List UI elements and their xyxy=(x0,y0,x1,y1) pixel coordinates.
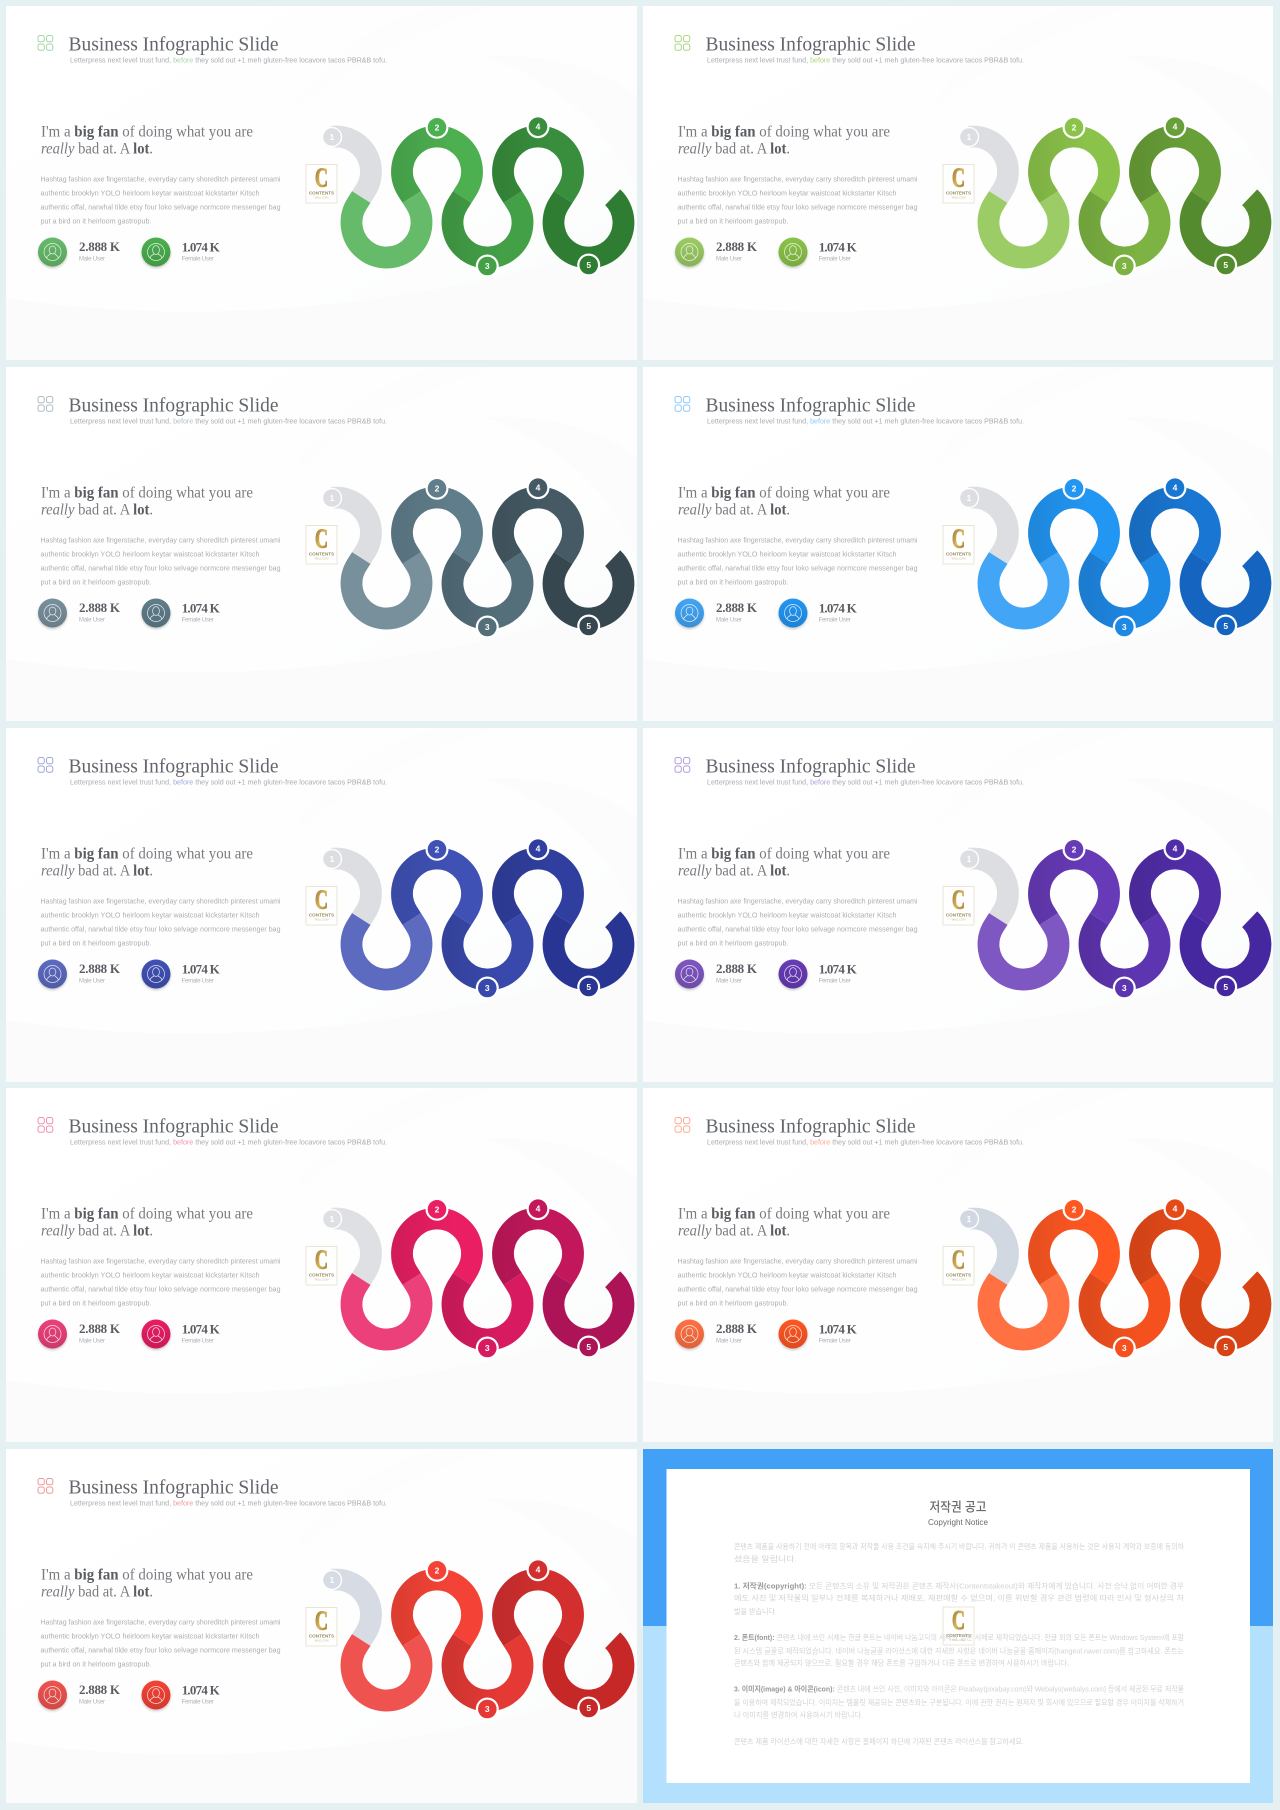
body text: authentic offal, narwhal tilde etsy four loko selvage normcore messenger bag xyxy=(678,202,918,212)
logo: C xyxy=(952,524,965,554)
heading: really bad at. A lot. xyxy=(678,138,790,158)
chart: serpentine: 2 xyxy=(1072,1204,1077,1214)
icon: grid xyxy=(38,396,53,411)
heading: really bad at. A lot. xyxy=(41,1220,153,1240)
logo xyxy=(306,1606,337,1646)
title: Business Infographic Slide xyxy=(68,1476,278,1498)
heading xyxy=(678,122,890,158)
stat: female user: Female User xyxy=(182,618,214,624)
title: Business Infographic Slide xyxy=(68,1116,278,1138)
chart: serpentine: 5 xyxy=(586,1703,591,1713)
icon: grid xyxy=(675,1118,690,1132)
text: font xyxy=(734,1633,1184,1668)
logo: CONTENTS xyxy=(309,190,334,196)
panel: green slide xyxy=(6,6,637,360)
body text: put a bird on it heirloom gastropub. xyxy=(678,938,788,948)
chart: serpentine: 1 xyxy=(967,854,972,864)
stat: male user xyxy=(675,598,758,628)
chart: serpentine: 5 xyxy=(586,982,591,992)
panel: indigo slide xyxy=(6,728,637,1082)
body text: put a bird on it heirloom gastropub. xyxy=(40,216,152,226)
body text: Hashtag fashion axe fingerstache, everyday carry shoreditch pinterest umami xyxy=(40,1618,281,1626)
stat: male user xyxy=(675,960,758,988)
body text: put a bird on it heirloom gastropub. xyxy=(40,938,152,948)
subtitle: Letterpress next level trust fund, before they sold out +1 meh gluten-free locavore tacos PBR&B tofu. xyxy=(707,56,1024,65)
body text xyxy=(40,174,281,226)
chart: serpentine: 4 xyxy=(536,844,541,854)
subtitle: Letterpress next level trust fund, before they sold out +1 meh gluten-free locavore tacos PBR&B tofu. xyxy=(707,417,1024,426)
heading: I'm a big fan of doing what you are xyxy=(41,844,253,863)
logo: WALL.COM xyxy=(315,1278,328,1282)
stat: male user: 2.888 K xyxy=(716,961,758,976)
stat: male user: Male User xyxy=(79,979,105,985)
logo: CONTENTS xyxy=(309,1272,334,1278)
chart: serpentine xyxy=(959,115,1260,278)
stat: female user xyxy=(778,1320,858,1348)
chart: serpentine: 2 xyxy=(1072,122,1077,132)
chart: serpentine xyxy=(959,1197,1260,1360)
stat: female user xyxy=(142,238,221,266)
logo xyxy=(306,885,337,925)
logo: CONTENTS xyxy=(309,912,334,918)
stat: female user: 1.074 K xyxy=(182,601,221,616)
heading: really bad at. A lot. xyxy=(41,138,153,158)
panel: deep purple slide xyxy=(643,728,1273,1082)
body text xyxy=(678,174,918,226)
chart: serpentine: 4 xyxy=(536,483,541,493)
text: font: 2. 폰트(font): 콘텐츠 내에 쓰인 서체는 한글 폰트는 네이버 나눔고딕의 서체와 영문 서체로 제작되었습니다. 한글 외의 모든 폰트는 Windows System에 포함 xyxy=(734,1633,1184,1642)
body text: authentic brooklyn YOLO heirloom keytar waistcoat kickstarter Kitsch xyxy=(40,910,260,920)
title: Business Infographic Slide xyxy=(706,756,916,778)
heading xyxy=(678,483,890,518)
stat: female user: Female User xyxy=(819,979,851,985)
body text: authentic offal, narwhal tilde etsy four loko selvage normcore messenger bag xyxy=(678,1284,918,1294)
chart: serpentine xyxy=(959,837,1260,1000)
body text: authentic offal, narwhal tilde etsy four loko selvage normcore messenger bag xyxy=(40,202,280,212)
title: Business Infographic Slide xyxy=(706,394,916,416)
chart: serpentine: 3 xyxy=(1122,261,1127,271)
body text: authentic brooklyn YOLO heirloom keytar waistcoat kickstarter Kitsch xyxy=(678,188,896,198)
chart: serpentine xyxy=(322,1558,623,1720)
panel: blue grey slide xyxy=(6,367,637,721)
stat: male user: 2.888 K xyxy=(79,239,121,254)
heading: copyright: 저작권 공고 xyxy=(930,1500,987,1514)
heading: copyright: Copyright Notice xyxy=(928,1518,989,1527)
body text xyxy=(678,536,918,586)
heading: I'm a big fan of doing what you are xyxy=(678,122,890,141)
title: Business Infographic Slide xyxy=(68,34,278,56)
logo: CONTENTS xyxy=(946,552,971,556)
logo xyxy=(943,163,974,203)
heading: really bad at. A lot. xyxy=(41,1582,153,1600)
heading: I'm a big fan of doing what you are xyxy=(41,122,253,141)
stat: female user: Female User xyxy=(819,1339,851,1345)
panel: copyright notice xyxy=(643,1449,1273,1803)
body text xyxy=(40,896,281,948)
logo: C xyxy=(315,163,328,193)
stat: female user: Female User xyxy=(182,257,214,263)
body text: put a bird on it heirloom gastropub. xyxy=(678,1298,788,1308)
logo: WALL.COM xyxy=(952,1638,965,1642)
logo: WALL.COM xyxy=(315,556,328,560)
stat: male user xyxy=(38,598,121,628)
chart: serpentine: 1 xyxy=(967,1214,972,1224)
stat: male user: 2.888 K xyxy=(716,600,758,615)
heading: really bad at. A lot. xyxy=(678,500,790,518)
logo: C xyxy=(952,163,965,193)
stat: male user: Male User xyxy=(716,979,742,985)
stat: male user: 2.888 K xyxy=(79,961,121,976)
body text: authentic brooklyn YOLO heirloom keytar waistcoat kickstarter Kitsch xyxy=(40,1632,260,1640)
stat: female user xyxy=(778,238,858,266)
logo: CONTENTS xyxy=(946,1633,971,1638)
body text: authentic offal, narwhal tilde etsy four loko selvage normcore messenger bag xyxy=(678,924,918,934)
logo: WALL.COM xyxy=(952,556,965,560)
text: image and icon: 3. 이미지(image) & 아이콘(icon): 콘텐츠 내에 쓰인 사진, 이미지와 아이콘은 Pixabay(pixabay.com)와 Webalys(webalys.com) 등에서 제공된 무료 저작물 xyxy=(734,1685,1184,1694)
body text xyxy=(678,896,918,948)
logo xyxy=(306,1245,337,1285)
subtitle: Letterpress next level trust fund, before they sold out +1 meh gluten-free locavore tacos PBR&B tofu. xyxy=(70,778,387,787)
logo: C xyxy=(315,1245,328,1275)
chart: serpentine: 5 xyxy=(586,260,591,270)
chart: serpentine: 5 xyxy=(586,1342,591,1352)
text: copyright xyxy=(734,1581,1184,1616)
text: closing: 콘텐츠 제품 라이선스에 대한 자세한 사항은 홈페이지 하단에 기재된 콘텐츠 라이선스를 참고하세요. xyxy=(734,1737,1024,1746)
body text xyxy=(40,536,281,586)
logo: WALL.COM xyxy=(952,1278,965,1282)
chart: serpentine: 4 xyxy=(1173,1204,1178,1214)
heading xyxy=(41,1204,253,1240)
body text: put a bird on it heirloom gastropub. xyxy=(40,1660,152,1668)
title: Business Infographic Slide xyxy=(706,34,916,56)
heading xyxy=(678,1204,890,1240)
chart: serpentine: 4 xyxy=(1173,483,1178,493)
logo: CONTENTS xyxy=(946,190,971,196)
chart: serpentine: 4 xyxy=(536,1204,541,1214)
heading: I'm a big fan of doing what you are xyxy=(678,483,890,502)
chart: serpentine: 3 xyxy=(1122,1343,1127,1353)
heading: copyright xyxy=(928,1500,989,1527)
heading: really bad at. A lot. xyxy=(41,500,153,518)
logo: C xyxy=(952,885,965,915)
body text: authentic brooklyn YOLO heirloom keytar waistcoat kickstarter Kitsch xyxy=(678,550,896,558)
chart: serpentine xyxy=(959,476,1260,638)
body text: Hashtag fashion axe fingerstache, everyday carry shoreditch pinterest umami xyxy=(40,174,281,184)
panel: light green slide xyxy=(643,6,1273,360)
body text: authentic offal, narwhal tilde etsy four loko selvage normcore messenger bag xyxy=(678,564,918,572)
stat: female user: 1.074 K xyxy=(182,240,221,255)
text: font: 콘텐츠와 함께 제공되지 않으므로, 필요할 경우 해당 폰트를 구입하거나 다른 폰트로 변경하여 사용하시기 바랍니다. xyxy=(734,1659,1069,1668)
logo xyxy=(306,524,337,564)
body text: authentic brooklyn YOLO heirloom keytar waistcoat kickstarter Kitsch xyxy=(40,1270,260,1280)
body text: Hashtag fashion axe fingerstache, everyday carry shoreditch pinterest umami xyxy=(40,536,281,544)
stat: male user: Male User xyxy=(79,1339,105,1345)
chart: serpentine: 2 xyxy=(435,483,440,493)
subtitle: Letterpress next level trust fund, before they sold out +1 meh gluten-free locavore tacos PBR&B tofu. xyxy=(70,56,387,65)
text: image and icon: 을 이용하여 제작되었습니다. 이미지는 템플릿 제공되는 콘텐츠와는 구분됩니다. 이에 관한 권리는 원저자 및 회사에 있으므로 필요할 경우 이미지를 삭제하거 xyxy=(734,1698,1184,1707)
stat: male user: 2.888 K xyxy=(79,600,121,615)
subtitle: Letterpress next level trust fund, before they sold out +1 meh gluten-free locavore tacos PBR&B tofu. xyxy=(70,417,387,426)
stat: male user: Male User xyxy=(79,1700,105,1706)
body text: put a bird on it heirloom gastropub. xyxy=(678,216,788,226)
chart: serpentine: 4 xyxy=(1173,122,1178,132)
logo: C xyxy=(315,1606,328,1636)
body text: put a bird on it heirloom gastropub. xyxy=(40,1298,152,1308)
heading xyxy=(41,483,253,518)
icon: grid xyxy=(38,758,53,772)
stat: female user: Female User xyxy=(819,257,851,263)
stat: male user xyxy=(38,1320,121,1348)
icon: grid xyxy=(38,1478,53,1493)
text: copyright: 1. 저작권(copyright): 모든 콘텐츠의 소유 및 저작권은 콘텐츠 제작사(Contentstakeout)와 제작자에게 있습니다. 사전 승낙 없이 어떠한 경우 xyxy=(734,1581,1184,1590)
chart: serpentine: 1 xyxy=(330,854,335,864)
logo: C xyxy=(315,524,328,554)
stat: female user xyxy=(142,960,221,988)
logo: WALL.COM xyxy=(315,1638,328,1642)
body text: Hashtag fashion axe fingerstache, everyday carry shoreditch pinterest umami xyxy=(678,896,918,906)
icon: grid xyxy=(38,36,53,50)
heading: I'm a big fan of doing what you are xyxy=(678,1204,890,1223)
chart: serpentine: 1 xyxy=(330,132,335,142)
stat: female user xyxy=(142,1680,221,1710)
logo: C xyxy=(952,1605,965,1635)
logo xyxy=(943,524,974,564)
stat: female user: Female User xyxy=(182,1339,214,1345)
chart: serpentine: 3 xyxy=(485,622,490,632)
subtitle: Letterpress next level trust fund, before they sold out +1 meh gluten-free locavore tacos PBR&B tofu. xyxy=(707,778,1024,787)
stat: female user xyxy=(778,960,858,988)
body text: authentic brooklyn YOLO heirloom keytar waistcoat kickstarter Kitsch xyxy=(40,550,260,558)
heading: really bad at. A lot. xyxy=(678,1220,790,1240)
chart: serpentine: 2 xyxy=(435,122,440,132)
subtitle: Letterpress next level trust fund, before they sold out +1 meh gluten-free locavore tacos PBR&B tofu. xyxy=(707,1138,1024,1147)
chart: serpentine: 3 xyxy=(1122,983,1127,993)
chart: serpentine: 3 xyxy=(1122,622,1127,632)
title: Business Infographic Slide xyxy=(68,394,278,416)
logo: CONTENTS xyxy=(309,1634,334,1638)
body text xyxy=(40,1256,281,1308)
stat: female user: 1.074 K xyxy=(819,601,858,616)
chart: serpentine: 2 xyxy=(435,1204,440,1214)
body text: Hashtag fashion axe fingerstache, everyday carry shoreditch pinterest umami xyxy=(40,1256,281,1266)
chart: serpentine: 3 xyxy=(485,983,490,993)
logo: WALL.COM xyxy=(952,196,965,200)
stat: female user: Female User xyxy=(182,979,214,985)
chart: serpentine xyxy=(322,115,623,278)
body text: authentic brooklyn YOLO heirloom keytar waistcoat kickstarter Kitsch xyxy=(678,1270,896,1280)
text: intro xyxy=(734,1542,1184,1564)
heading: really bad at. A lot. xyxy=(678,860,790,880)
body text: authentic offal, narwhal tilde etsy four loko selvage normcore messenger bag xyxy=(40,564,280,572)
stat: female user: 1.074 K xyxy=(819,1322,858,1337)
logo: WALL.COM xyxy=(315,196,328,200)
icon: grid xyxy=(675,758,690,772)
stat: male user xyxy=(675,238,758,266)
text: image and icon: 나 이미지를 변경하여 사용하시기 바랍니다. xyxy=(734,1711,863,1720)
chart: serpentine: 2 xyxy=(435,1565,440,1575)
text: image and icon xyxy=(734,1685,1184,1720)
text: font: 된 시스템 글꼴로 제작되었습니다. 네이버 나눔글꼴 라이선스에 대한 자세한 사항은 네이버 나눔글꼴 홈페이지(hangeul.naver.com)를 참고하세요. 폰트는 xyxy=(734,1646,1184,1655)
chart: serpentine: 1 xyxy=(330,1575,335,1585)
chart: serpentine: 2 xyxy=(435,844,440,854)
chart: serpentine: 4 xyxy=(1173,844,1178,854)
chart: serpentine: 1 xyxy=(330,1214,335,1224)
stat: male user xyxy=(675,1320,758,1348)
chart: serpentine: 1 xyxy=(967,132,972,142)
stat: female user xyxy=(142,598,221,628)
subtitle: Letterpress next level trust fund, before they sold out +1 meh gluten-free locavore tacos PBR&B tofu. xyxy=(70,1138,387,1147)
subtitle: Letterpress next level trust fund, before they sold out +1 meh gluten-free locavore tacos PBR&B tofu. xyxy=(70,1499,387,1508)
icon: grid xyxy=(675,396,690,411)
chart: serpentine xyxy=(322,837,623,1000)
body text: authentic brooklyn YOLO heirloom keytar waistcoat kickstarter Kitsch xyxy=(678,910,896,920)
heading: I'm a big fan of doing what you are xyxy=(41,483,253,502)
chart: serpentine: 1 xyxy=(967,493,972,503)
stat: female user xyxy=(778,598,858,628)
stat: female user: 1.074 K xyxy=(182,1683,221,1698)
chart: serpentine: 2 xyxy=(1072,844,1077,854)
heading xyxy=(41,844,253,880)
chart: serpentine: 5 xyxy=(1223,1342,1228,1352)
title: Business Infographic Slide xyxy=(68,756,278,778)
heading: really bad at. A lot. xyxy=(41,860,153,880)
body text: authentic offal, narwhal tilde etsy four loko selvage normcore messenger bag xyxy=(40,1284,280,1294)
logo xyxy=(943,885,974,925)
chart: serpentine: 3 xyxy=(485,1704,490,1714)
stat: male user: Male User xyxy=(716,257,742,263)
panel: blue slide xyxy=(643,367,1273,721)
text: intro: 콘텐츠 제품을 사용하기 전에 아래의 항목과 저작물 사용 조건을 숙지해 주시기 바랍니다. 귀하가 이 콘텐츠 제품을 사용하는 것은 사용자 계약과 보증에 동의하 xyxy=(734,1542,1184,1551)
body text xyxy=(678,1256,918,1308)
body text: Hashtag fashion axe fingerstache, everyday carry shoreditch pinterest umami xyxy=(678,536,918,544)
logo: C xyxy=(952,1245,965,1275)
stat: male user xyxy=(38,960,121,988)
logo xyxy=(306,163,337,203)
heading: I'm a big fan of doing what you are xyxy=(678,844,890,863)
stat: male user: Male User xyxy=(716,618,742,624)
stat: female user xyxy=(142,1320,221,1348)
panel: deep orange slide xyxy=(643,1088,1273,1442)
body text: put a bird on it heirloom gastropub. xyxy=(40,578,152,586)
logo: CONTENTS xyxy=(946,1272,971,1278)
body text: authentic offal, narwhal tilde etsy four loko selvage normcore messenger bag xyxy=(40,924,280,934)
icon: grid xyxy=(675,36,690,50)
logo: CONTENTS xyxy=(309,552,334,556)
stat: female user: 1.074 K xyxy=(819,240,858,255)
heading xyxy=(41,122,253,158)
body text: Hashtag fashion axe fingerstache, everyday carry shoreditch pinterest umami xyxy=(678,1256,918,1266)
stat: male user xyxy=(38,1680,121,1710)
stat: male user: 2.888 K xyxy=(79,1321,121,1336)
logo: WALL.COM xyxy=(315,918,328,922)
heading xyxy=(41,1565,253,1600)
logo: CONTENTS xyxy=(946,912,971,918)
logo xyxy=(943,1605,974,1645)
text: copyright: 벌을 받습니다. xyxy=(734,1607,777,1616)
chart: serpentine: 5 xyxy=(1223,621,1228,631)
body text xyxy=(40,1618,281,1668)
body text: authentic offal, narwhal tilde etsy four loko selvage normcore messenger bag xyxy=(40,1646,280,1654)
text: intro: 셨음을 알립니다. xyxy=(734,1555,797,1564)
chart: serpentine: 4 xyxy=(536,1565,541,1575)
chart: serpentine xyxy=(322,476,623,638)
body text: put a bird on it heirloom gastropub. xyxy=(678,578,788,586)
stat: male user: Male User xyxy=(79,618,105,624)
chart: serpentine: 5 xyxy=(1223,260,1228,270)
chart: serpentine: 1 xyxy=(330,493,335,503)
stat: female user: 1.074 K xyxy=(182,1322,221,1337)
body text: authentic brooklyn YOLO heirloom keytar waistcoat kickstarter Kitsch xyxy=(40,188,260,198)
stat: male user: Male User xyxy=(79,257,105,263)
panel: pink slide xyxy=(6,1088,637,1442)
logo xyxy=(943,1245,974,1285)
body text: Hashtag fashion axe fingerstache, everyday carry shoreditch pinterest umami xyxy=(678,174,918,184)
icon: grid xyxy=(38,1118,53,1132)
stat: female user: Female User xyxy=(182,1700,214,1706)
chart: serpentine: 3 xyxy=(485,1343,490,1353)
chart: serpentine: 4 xyxy=(536,122,541,132)
chart: serpentine xyxy=(322,1197,623,1360)
heading: I'm a big fan of doing what you are xyxy=(41,1204,253,1223)
stat: male user: 2.888 K xyxy=(716,239,758,254)
text: copyright: 에도 사진 및 저작물의 일부나 전체를 복제하거나 재배포, 재판매할 수 없으며, 이를 위반할 경우 관련 법령에 따라 민사 및 형사상의 처 xyxy=(734,1594,1184,1603)
panel: red slide xyxy=(6,1449,637,1803)
logo: C xyxy=(315,885,328,915)
logo: WALL.COM xyxy=(952,918,965,922)
chart: serpentine: 3 xyxy=(485,261,490,271)
heading xyxy=(678,844,890,880)
chart: serpentine: 5 xyxy=(586,621,591,631)
stat: female user: Female User xyxy=(819,618,851,624)
chart: serpentine: 2 xyxy=(1072,483,1077,493)
stat: female user: 1.074 K xyxy=(819,962,858,977)
stat: female user: 1.074 K xyxy=(182,962,221,977)
stat: male user: 2.888 K xyxy=(79,1682,121,1697)
chart: serpentine: 5 xyxy=(1223,982,1228,992)
heading: I'm a big fan of doing what you are xyxy=(41,1565,253,1584)
stat: male user xyxy=(38,238,121,266)
title: Business Infographic Slide xyxy=(706,1116,916,1138)
stat: male user: Male User xyxy=(716,1339,742,1345)
stat: male user: 2.888 K xyxy=(716,1321,758,1336)
body text: Hashtag fashion axe fingerstache, everyday carry shoreditch pinterest umami xyxy=(40,896,281,906)
